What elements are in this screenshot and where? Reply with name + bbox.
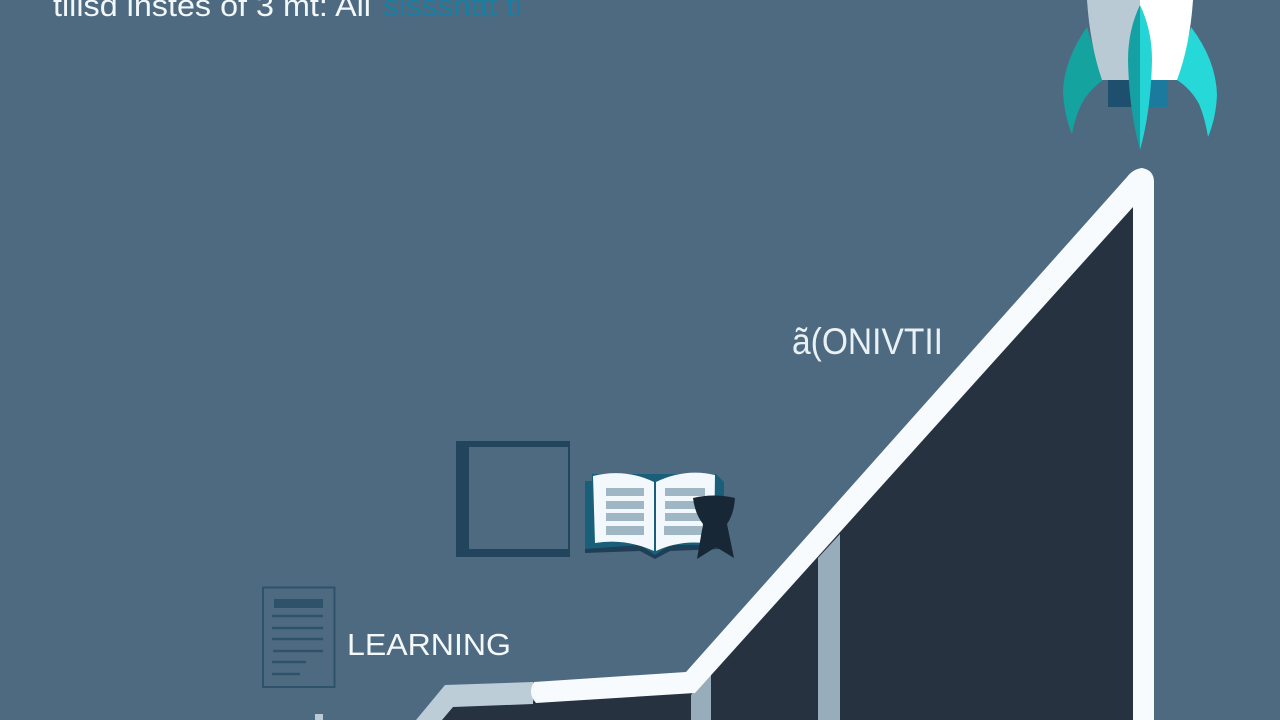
icon: document [263, 588, 334, 687]
label: growth: ã(ONIVTII [792, 321, 943, 362]
chart: growth line [416, 168, 1154, 720]
icon: open book with ribbon [585, 473, 735, 559]
label: learning: LEARNING [347, 627, 511, 662]
title text [53, 0, 522, 23]
book text lines [606, 488, 705, 535]
chart: dark area under growth line [441, 207, 1133, 720]
icon: rocket [1063, 0, 1217, 150]
chart: vertical support bars [691, 534, 840, 720]
icon: empty square frame [456, 441, 570, 557]
small marker at bottom edge [315, 714, 323, 720]
